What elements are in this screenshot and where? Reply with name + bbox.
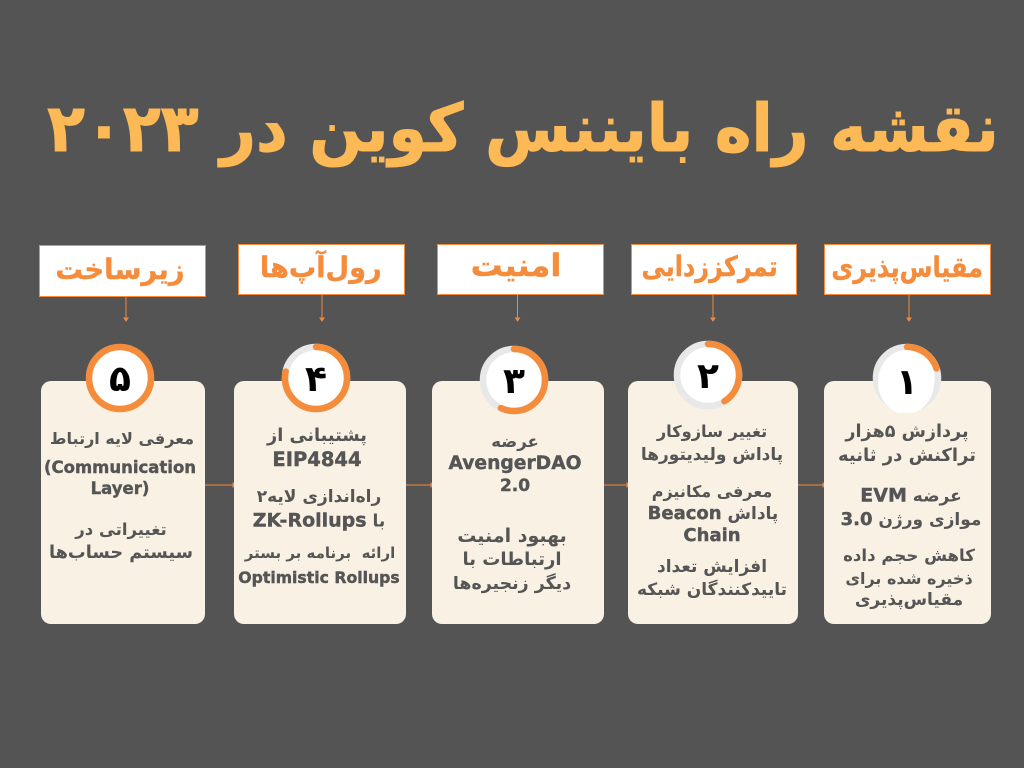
text: security line 2: ارتباطات با bbox=[463, 549, 561, 570]
panel: تمرکززدایی bbox=[628, 381, 798, 624]
heading: زیرساخت: زیرساخت bbox=[55, 253, 184, 286]
text: data line 2: ذخیره شده برای bbox=[845, 569, 973, 588]
text: AvengerDAO: AvengerDAO bbox=[448, 453, 582, 474]
text: validators line 2: تاییدکنندگان شبکه bbox=[637, 580, 787, 600]
text: layer 2 launch: راه‌اندازی لایه۲ bbox=[257, 487, 381, 507]
heading: رول‌آپ‌ها bbox=[238, 244, 405, 295]
heading: مقیاس‌پذیری: مقیاس‌پذیری bbox=[831, 251, 983, 284]
text: mechanism line 3: Chain bbox=[683, 525, 741, 546]
panel: امنیت bbox=[432, 381, 604, 624]
icon: number ring 2: ۲ bbox=[697, 356, 719, 397]
text: support line 1: پشتیبانی از bbox=[267, 426, 367, 446]
text: offering: عرضه bbox=[491, 432, 539, 451]
icon: number ring 5 bbox=[86, 344, 154, 412]
text: account changes line 2: سیستم حساب‌ها bbox=[49, 543, 193, 563]
text: Optimistic Rollups: Optimistic Rollups bbox=[238, 568, 400, 587]
title: نقشه راه بایننس کوین در ۲۰۲۳ bbox=[47, 90, 999, 167]
text: EVM line 1: عرضه EVM bbox=[860, 484, 962, 506]
text: processing line 1: پردازش ۵هزار bbox=[845, 422, 969, 442]
text: processing line 2: تراکنش در ثانیه bbox=[838, 445, 976, 466]
icon: number ring 4 bbox=[282, 344, 350, 412]
heading: تمرکززدایی: تمرکززدایی bbox=[642, 250, 778, 283]
text: mechanism line 2: پاداش Beacon bbox=[648, 503, 778, 524]
icon: number ring 3 bbox=[480, 346, 548, 414]
heading: زیرساخت bbox=[39, 245, 206, 297]
icon: number ring 5: ۵ bbox=[109, 359, 131, 400]
heading: امنیت: امنیت bbox=[470, 248, 561, 284]
text: layer label: Layer) bbox=[91, 479, 149, 498]
text: change line 1: تغییر سازوکار bbox=[657, 422, 767, 441]
heading: امنیت bbox=[437, 244, 604, 295]
icon: number ring 4: ۴ bbox=[305, 359, 327, 400]
panel: زیرساخت bbox=[41, 381, 205, 624]
heading: تمرکززدایی bbox=[631, 244, 797, 295]
text: EVM line 2: موازی ورژن 3.0 bbox=[841, 509, 981, 530]
panel: رول‌آپ‌ها bbox=[234, 381, 406, 624]
text: change line 2: پاداش ولیدیتورها bbox=[641, 445, 783, 465]
text: security line 3: دیگر زنجیره‌ها bbox=[453, 574, 571, 594]
panel: مقیاس‌پذیری bbox=[824, 381, 991, 624]
text: app offering: ارائه برنامه بر بستر bbox=[245, 544, 395, 562]
text: data line 1: کاهش حجم داده bbox=[843, 546, 975, 565]
text: account changes line 1: تغییراتی در bbox=[75, 520, 167, 539]
icon: number ring 1: ۱ bbox=[896, 362, 918, 403]
text: validators line 1: افزایش تعداد bbox=[657, 557, 767, 577]
text: communication label: (Communication bbox=[44, 458, 196, 477]
text: version: 2.0 bbox=[500, 476, 530, 496]
text: mechanism line 1: معرفی مکانیزم bbox=[652, 482, 772, 501]
text: ZK-Rollups: با ZK-Rollups bbox=[253, 510, 385, 532]
icon: number ring 3: ۳ bbox=[503, 361, 525, 402]
text: communication layer: معرفی لایه ارتباط bbox=[50, 429, 194, 448]
text: data line 3: مقیاس‌پذیری bbox=[855, 590, 963, 610]
icon: number ring 1 bbox=[872, 344, 942, 413]
text: EIP4844: EIP4844 bbox=[272, 448, 362, 471]
text: security line 1: بهبود امنیت bbox=[457, 525, 567, 547]
heading: مقیاس‌پذیری bbox=[824, 244, 991, 295]
heading: رول‌آپ‌ها: رول‌آپ‌ها bbox=[260, 251, 381, 284]
icon: number ring 2 bbox=[674, 340, 742, 409]
